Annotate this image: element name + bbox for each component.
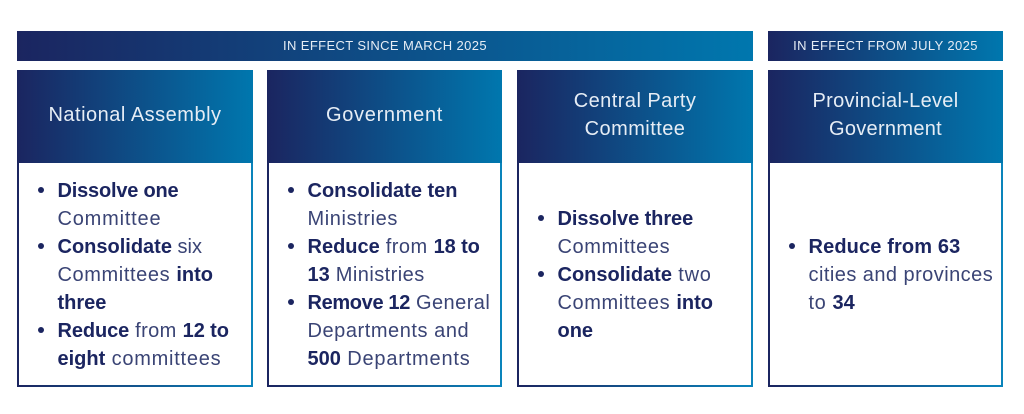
bullet list: Government: Consolidate ten bbox=[308, 180, 458, 202]
bullet list: Provincial-Level Government: cities and provinces bbox=[808, 264, 993, 286]
bullet list: National Assembly: three bbox=[58, 292, 106, 314]
heading: Provincial-Level Government: Provincial-Level bbox=[812, 90, 958, 112]
heading: Central Party Committee bbox=[517, 70, 753, 163]
bullet list: National Assembly: Committees into bbox=[58, 264, 213, 286]
bullet list: Government: Departments and bbox=[308, 320, 469, 342]
bullet list: Government bbox=[288, 180, 490, 370]
text block: Government changes bbox=[267, 163, 502, 387]
heading: Provincial-Level Government bbox=[768, 70, 1003, 163]
bullet list: National Assembly: eight committees bbox=[58, 348, 221, 370]
banner: in effect from July 2025: IN EFFECT FROM JULY 2025 bbox=[793, 38, 978, 53]
bullet list: National Assembly: Reduce from 12 to bbox=[58, 320, 229, 342]
heading: Government: Government bbox=[326, 104, 443, 126]
panel: National Assembly bbox=[17, 70, 253, 387]
panel: Government bbox=[267, 70, 502, 387]
heading: Central Party Committee: Central Party bbox=[574, 90, 696, 112]
bullet list: Government: Reduce from 18 to bbox=[308, 236, 480, 258]
bullet list: National Assembly: Consolidate six bbox=[58, 236, 202, 258]
bullet list: National Assembly bbox=[38, 180, 229, 370]
banner: in effect from July 2025 bbox=[768, 31, 1003, 61]
bullet list: Central Party Committee: Consolidate two bbox=[558, 264, 712, 286]
bullet list: Provincial-Level Government: Reduce from 63 bbox=[808, 236, 960, 258]
bullet list: National Assembly: Dissolve one bbox=[58, 180, 178, 202]
bullet list: Central Party Committee: Dissolve three bbox=[558, 208, 693, 230]
text block: Provincial-Level Government changes bbox=[768, 163, 1003, 387]
bullet list: Central Party Committee: Committees into bbox=[558, 292, 713, 314]
panel: Provincial-Level Government bbox=[768, 70, 1003, 387]
text block: National Assembly changes bbox=[17, 163, 253, 387]
heading: Provincial-Level Government: Government bbox=[829, 118, 942, 140]
heading: National Assembly bbox=[17, 70, 253, 163]
bullet list: Provincial-Level Government: to 34 bbox=[808, 292, 855, 314]
heading: Central Party Committee: Committee bbox=[585, 118, 685, 140]
heading: Government bbox=[267, 70, 502, 163]
bullet list: Government: Ministries bbox=[308, 208, 398, 230]
bullet list: National Assembly: Committee bbox=[58, 208, 161, 230]
bullet list: Central Party Committee bbox=[538, 208, 713, 342]
heading: National Assembly: National Assembly bbox=[48, 104, 222, 126]
banner: in effect since March 2025 bbox=[17, 31, 753, 61]
text block: Central Party Committee changes bbox=[517, 163, 753, 387]
bullet list: Government: 13 Ministries bbox=[308, 264, 425, 286]
bullet list: Government: Remove 12 General bbox=[308, 292, 490, 314]
bullet list: Government: 500 Departments bbox=[308, 348, 471, 370]
banner: in effect since March 2025: IN EFFECT SINCE MARCH 2025 bbox=[283, 38, 487, 53]
bullet list: Central Party Committee: one bbox=[558, 320, 593, 342]
bullet list: Provincial-Level Government bbox=[789, 236, 993, 314]
bullet list: Central Party Committee: Committees bbox=[558, 236, 670, 258]
panel: Central Party Committee bbox=[517, 70, 753, 387]
